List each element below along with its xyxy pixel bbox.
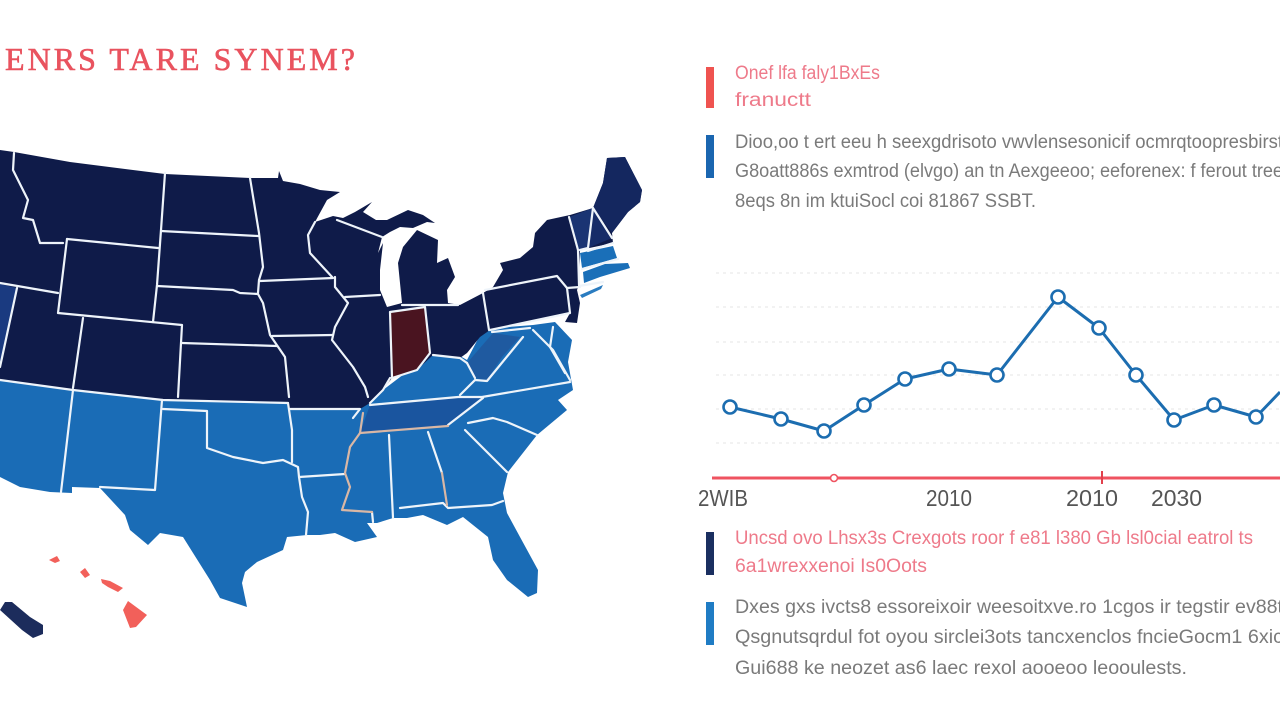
accent bar: red: [706, 67, 714, 108]
axis line: [712, 476, 1280, 480]
region: northern states: [0, 150, 642, 410]
state: Massachusetts: [580, 246, 617, 268]
callout heading: [735, 528, 1253, 577]
line chart: [698, 273, 1280, 511]
region: southern states: [0, 322, 573, 607]
state: Maine: [593, 157, 642, 233]
data line: [730, 297, 1280, 431]
state: Vermont: [569, 208, 593, 250]
state: Nevada: [0, 284, 17, 367]
callout heading: [735, 63, 880, 111]
accent bar: navy: [706, 532, 714, 575]
callout heading: franuctt: [735, 90, 812, 111]
body text: [735, 132, 1280, 212]
callout heading: Onef lfa faly1BxEs: [735, 63, 880, 84]
grid lines: [716, 273, 1280, 443]
panel: top notes: [706, 63, 1280, 212]
Alaska fragment: [0, 602, 43, 638]
callout heading: 6a1wrexxenoi Is0Oots: [735, 556, 927, 577]
title: ENRS TARE SYNEM?: [5, 41, 355, 77]
state: Long Island: [580, 285, 603, 298]
accent bar: blue: [706, 135, 714, 178]
panel: bottom notes: [706, 528, 1280, 679]
state: Tennessee: [360, 397, 482, 433]
axis marker: circle: [830, 474, 838, 482]
body text: Dxes gxs ivcts8 essoreixoir weesoitxve.ro 1cgos ir tegstir ev88t: [735, 597, 1280, 618]
river borders: [342, 413, 372, 512]
x axis labels: 2010: [926, 485, 972, 511]
accent bar: blue: [706, 602, 714, 645]
body text: Gui688 ke neozet as6 laec rexol aooeoo leooulests.: [735, 658, 1187, 679]
body text: [735, 597, 1280, 679]
Hawaii islands: [49, 556, 147, 628]
body text: 8eqs 8n im ktuiSocl coi 81867 SSBT.: [735, 191, 1036, 212]
state: Indiana: [390, 307, 430, 378]
x axis labels: 2010: [1066, 485, 1118, 511]
callout heading: Uncsd ovo Lhsx3s Crexgots roor f e81 l380 Gb lsl0cial eatrol ts: [735, 528, 1253, 549]
x axis labels: [698, 485, 1202, 511]
axis marker: tick: [1101, 471, 1103, 484]
panel: US map: [0, 150, 642, 638]
body text: Qsgnutsqrdul fot oyou sirclei3ots tancxenclos fncieGocm1 6xic: [735, 627, 1280, 648]
data points: [724, 290, 1262, 438]
state: Connecticut: [583, 263, 630, 283]
x axis labels: 2030: [1151, 485, 1202, 511]
x axis labels: 2WIB: [698, 485, 748, 511]
state borders: [0, 153, 618, 535]
state: New Hampshire: [588, 208, 612, 248]
state: West Virginia: [467, 333, 520, 380]
